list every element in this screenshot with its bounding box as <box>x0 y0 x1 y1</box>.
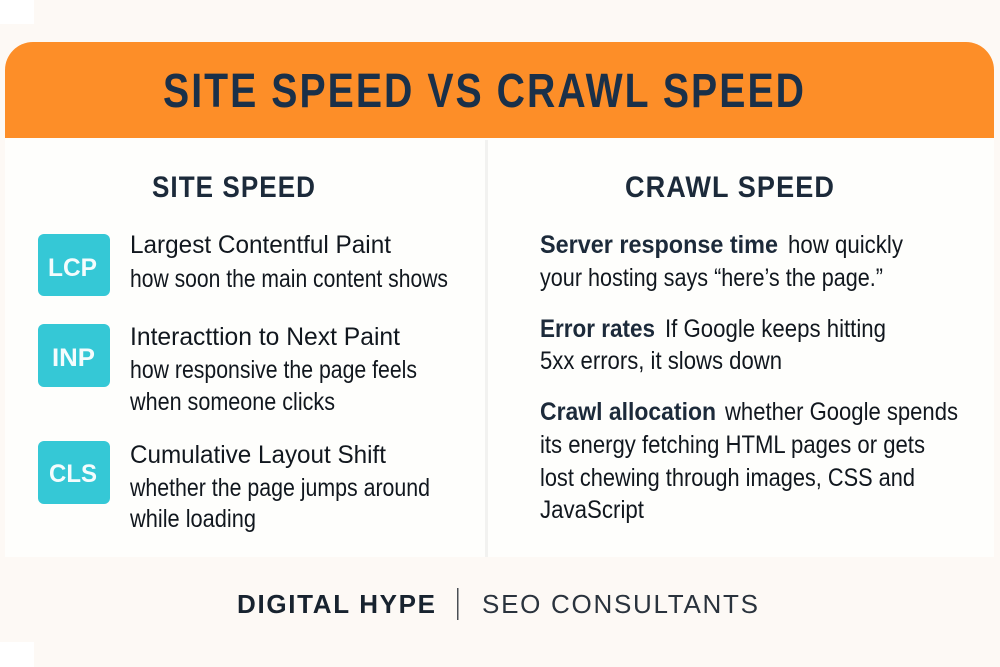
icon: LCP badge <box>38 234 110 296</box>
item: error rates: Error rates <box>540 315 655 343</box>
item: crawl allocation: Crawl allocation <box>540 398 716 426</box>
column divider <box>485 140 488 557</box>
LCP text <box>130 231 448 293</box>
LCP text: how soon the main content shows <box>130 265 448 293</box>
tagline: SEO CONSULTANTS <box>482 589 758 619</box>
panel: site speed <box>38 171 448 533</box>
item: crawl allocation: whether Google spends <box>724 398 958 426</box>
panel: crawl speed <box>540 171 958 524</box>
footer <box>237 588 758 620</box>
heading: crawl speed: CRAWL SPEED <box>625 171 835 204</box>
brand name: DIGITAL HYPE <box>237 589 435 619</box>
CLS text: Cumulative Layout Shift <box>130 441 386 469</box>
item: error rates: 5xx errors, it slows down <box>540 347 782 375</box>
LCP text: Largest Contentful Paint <box>130 231 391 259</box>
CLS text: while loading <box>129 505 256 533</box>
icon: INP badge: INP <box>52 344 95 372</box>
item: server response time: Server response time <box>540 231 778 259</box>
INP text: Interacttion to Next Paint <box>130 323 400 351</box>
footer separator <box>457 588 458 620</box>
INP text: when someone clicks <box>129 388 335 416</box>
item: crawl allocation <box>540 398 958 524</box>
INP text <box>129 323 417 416</box>
item: INP <box>38 323 417 416</box>
CLS text <box>129 441 430 533</box>
icon: CLS badge: CLS <box>49 460 97 488</box>
icon: LCP badge: LCP <box>48 254 97 282</box>
item: crawl allocation: lost chewing through images, CSS and <box>540 464 915 492</box>
item: error rates <box>540 315 886 375</box>
item: CLS <box>38 441 430 533</box>
item: server response time <box>540 231 903 292</box>
heading: site speed: SITE SPEED <box>152 171 316 204</box>
item: server response time: your hosting says “here’s the page.” <box>540 264 883 292</box>
item: crawl allocation: JavaScript <box>540 496 644 524</box>
icon: CLS badge <box>38 441 110 504</box>
item: crawl allocation: its energy fetching HTML pages or gets <box>540 431 925 459</box>
item: LCP <box>38 231 448 296</box>
item: server response time: how quickly <box>788 231 903 259</box>
main content panel <box>5 138 994 557</box>
title banner <box>5 42 994 138</box>
CLS text: whether the page jumps around <box>129 474 430 502</box>
INP text: how responsive the page feels <box>130 356 417 384</box>
item: error rates: If Google keeps hitting <box>665 315 886 343</box>
title: SITE SPEED VS CRAWL SPEED <box>163 65 806 118</box>
icon: INP badge <box>38 324 110 387</box>
